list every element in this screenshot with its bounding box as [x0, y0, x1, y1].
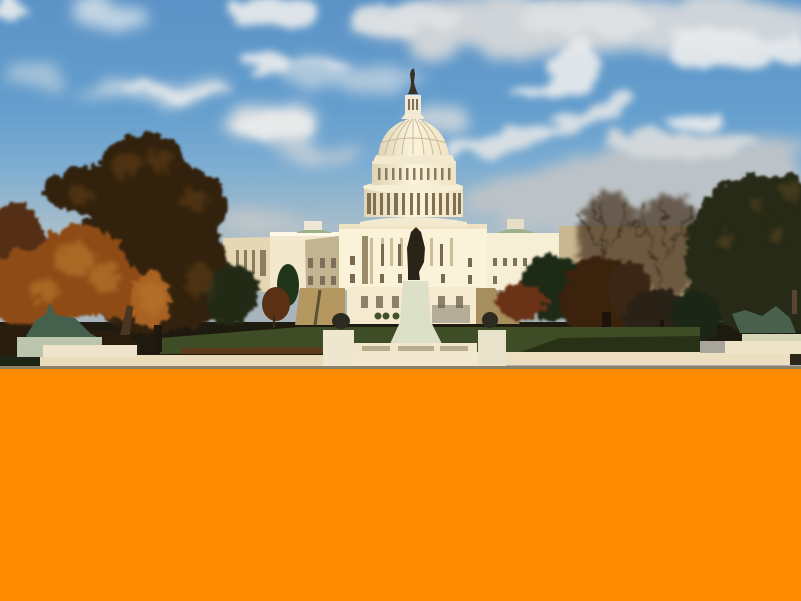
marble steps left — [40, 355, 323, 367]
statue of freedom — [408, 69, 418, 94]
left cavalry group — [26, 303, 98, 338]
left dome pavilion — [296, 229, 333, 233]
orange tree — [0, 202, 170, 332]
pedestals with lions — [323, 330, 354, 366]
left wing — [270, 233, 340, 290]
equestrian statue — [407, 227, 425, 280]
drum base — [360, 217, 467, 226]
grand steps — [295, 288, 345, 325]
right tree group — [497, 175, 801, 352]
terrace front — [352, 352, 478, 367]
bare trees — [578, 192, 706, 295]
orange panel — [0, 369, 801, 601]
statue pedestal — [390, 281, 442, 344]
small trees by the building — [277, 264, 299, 306]
photo: US Capitol with autumn trees — [0, 0, 801, 369]
lawn — [160, 327, 700, 354]
dome cap — [378, 118, 449, 156]
dome — [360, 69, 467, 226]
clouds — [0, 0, 801, 235]
capitol building — [223, 69, 699, 325]
upper drum — [372, 161, 456, 185]
bare tree trunks — [602, 290, 797, 352]
mid trees — [497, 255, 696, 346]
dark oak — [45, 132, 258, 335]
lantern — [401, 113, 425, 119]
ground and distant foliage band — [0, 322, 801, 356]
right cavalry group — [732, 306, 796, 333]
sky — [0, 0, 801, 369]
lower dark foliage — [0, 324, 140, 358]
marble steps right — [506, 352, 796, 365]
balustrade — [352, 343, 477, 353]
central block — [339, 226, 487, 290]
right wing — [487, 233, 559, 290]
far left wing — [223, 237, 270, 292]
right large tree — [669, 175, 801, 344]
left tree group — [0, 132, 299, 358]
ulysses grant memorial — [0, 227, 801, 369]
lower terrace — [347, 287, 480, 324]
